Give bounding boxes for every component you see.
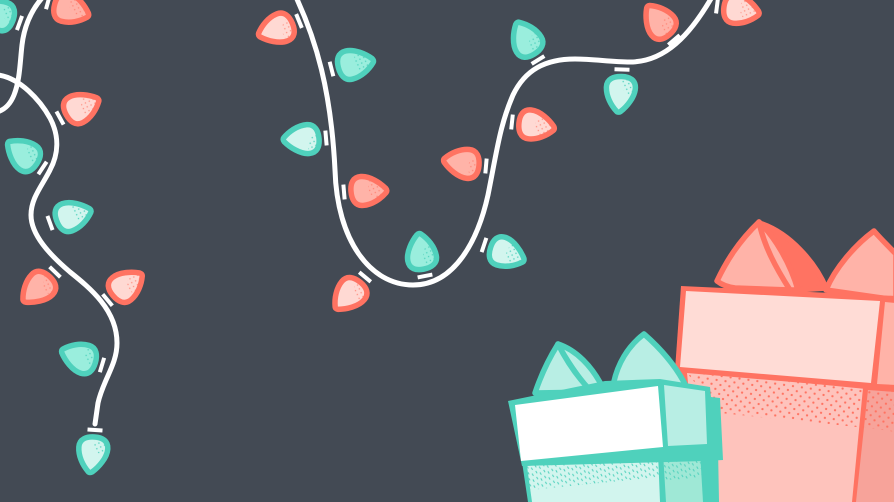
bulb: coral, left strand 4 xyxy=(20,266,62,306)
gift: large coral box xyxy=(675,222,894,502)
bulb: teal, centre strand 2 xyxy=(328,48,376,82)
string of lights: left strand, short end xyxy=(0,0,42,112)
bulb: coral, centre strand 4 xyxy=(343,172,396,207)
box body: front and side xyxy=(522,448,719,502)
bulb: teal, centre strand 7 xyxy=(480,234,527,269)
bulb: coral, centre strand 6 xyxy=(332,270,372,312)
bulb: teal, left strand 2 xyxy=(4,138,48,176)
bulb: teal, top left xyxy=(0,0,24,34)
string of lights: centre strand xyxy=(296,0,712,285)
bulb: coral, centre strand 13 xyxy=(715,0,768,26)
bulb: coral, centre strand 12 xyxy=(643,2,680,46)
bulb: coral, left strand 1 xyxy=(54,92,102,127)
bulb: coral, top left xyxy=(44,0,92,25)
lid: coral with front and side panels xyxy=(675,286,894,392)
bulb: teal, centre strand 10 xyxy=(510,19,546,66)
bulb: coral, centre strand 8 xyxy=(442,147,496,182)
lid: teal with white front and pale side xyxy=(508,379,723,466)
box body: front and side xyxy=(675,365,894,502)
bulb: teal, end of left strand xyxy=(76,428,110,476)
bulb: teal, centre strand 3 xyxy=(280,122,329,156)
bulb: coral, left strand 5 xyxy=(101,270,145,307)
bulb: teal, left strand 6 xyxy=(58,342,106,376)
bulb: teal, centre strand 11 xyxy=(604,67,638,115)
bow: teal loops xyxy=(535,334,686,393)
bulb: teal, left strand 3 xyxy=(46,200,94,234)
string of lights: left strand, long xyxy=(0,75,117,424)
gift: small teal box xyxy=(508,334,723,502)
bulb: teal, centre strand 5 xyxy=(404,230,440,280)
bow: coral loops xyxy=(717,222,894,300)
bulb: coral, centre strand 9 xyxy=(510,108,563,141)
bulb: coral, centre strand 1 xyxy=(256,10,304,45)
